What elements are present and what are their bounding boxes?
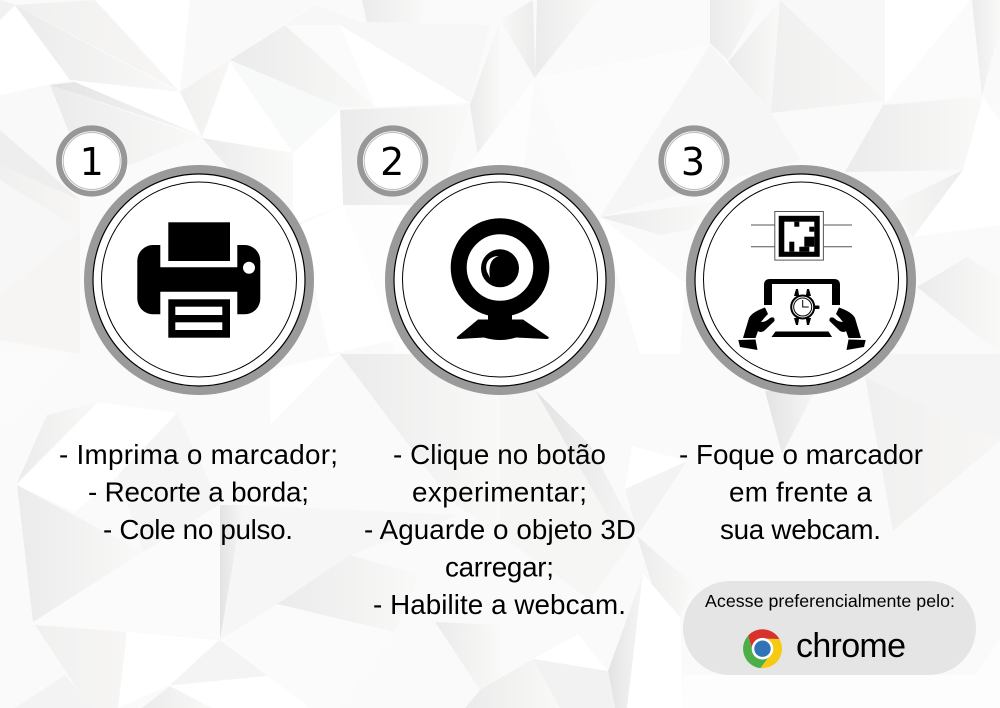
instructions 2: carregar; — [445, 552, 554, 582]
instructions 3: - Foque o marcador — [679, 439, 923, 470]
chrome wordmark: chrome — [796, 627, 906, 665]
instructions 2: experimentar; — [412, 476, 587, 508]
number badge 3 — [661, 128, 727, 194]
instructions 2 — [364, 439, 636, 620]
callout text: Acesse preferencialmente pelo: — [705, 591, 955, 611]
number badge 2 — [360, 128, 425, 194]
icon ring 2 — [389, 169, 611, 391]
instructions 3: em frente a — [729, 476, 873, 508]
instructions 2: - Aguarde o objeto 3D — [364, 514, 636, 545]
instructions 1 — [59, 439, 338, 545]
step 3 panel — [661, 128, 923, 545]
icon ring 3 — [690, 169, 912, 391]
number badge 3: 3 — [681, 140, 705, 184]
step 1 panel — [59, 128, 338, 545]
number badge 1 — [59, 128, 124, 194]
instructions 2: - Clique no botão — [393, 439, 606, 470]
instructions 1: - Imprima o marcador; — [59, 439, 338, 470]
icon: chrome logo — [743, 629, 782, 668]
icon: hands holding tablet with watch — [738, 279, 866, 350]
instructions 1: - Recorte a borda; — [88, 476, 309, 508]
icon ring 1 — [88, 169, 310, 391]
callout: browser recommendation — [683, 581, 976, 675]
instructions 3: sua webcam. — [720, 514, 881, 545]
icon: printer — [137, 222, 260, 338]
step 2 panel — [360, 128, 636, 620]
instructions 2: - Habilite a webcam. — [373, 589, 626, 620]
number badge 2: 2 — [380, 140, 404, 184]
icon: webcam — [457, 226, 549, 340]
icon: marker — [751, 212, 852, 260]
number badge 1: 1 — [80, 140, 104, 184]
instructions 3 — [679, 439, 923, 545]
instructions 1: - Cole no pulso. — [103, 514, 293, 545]
